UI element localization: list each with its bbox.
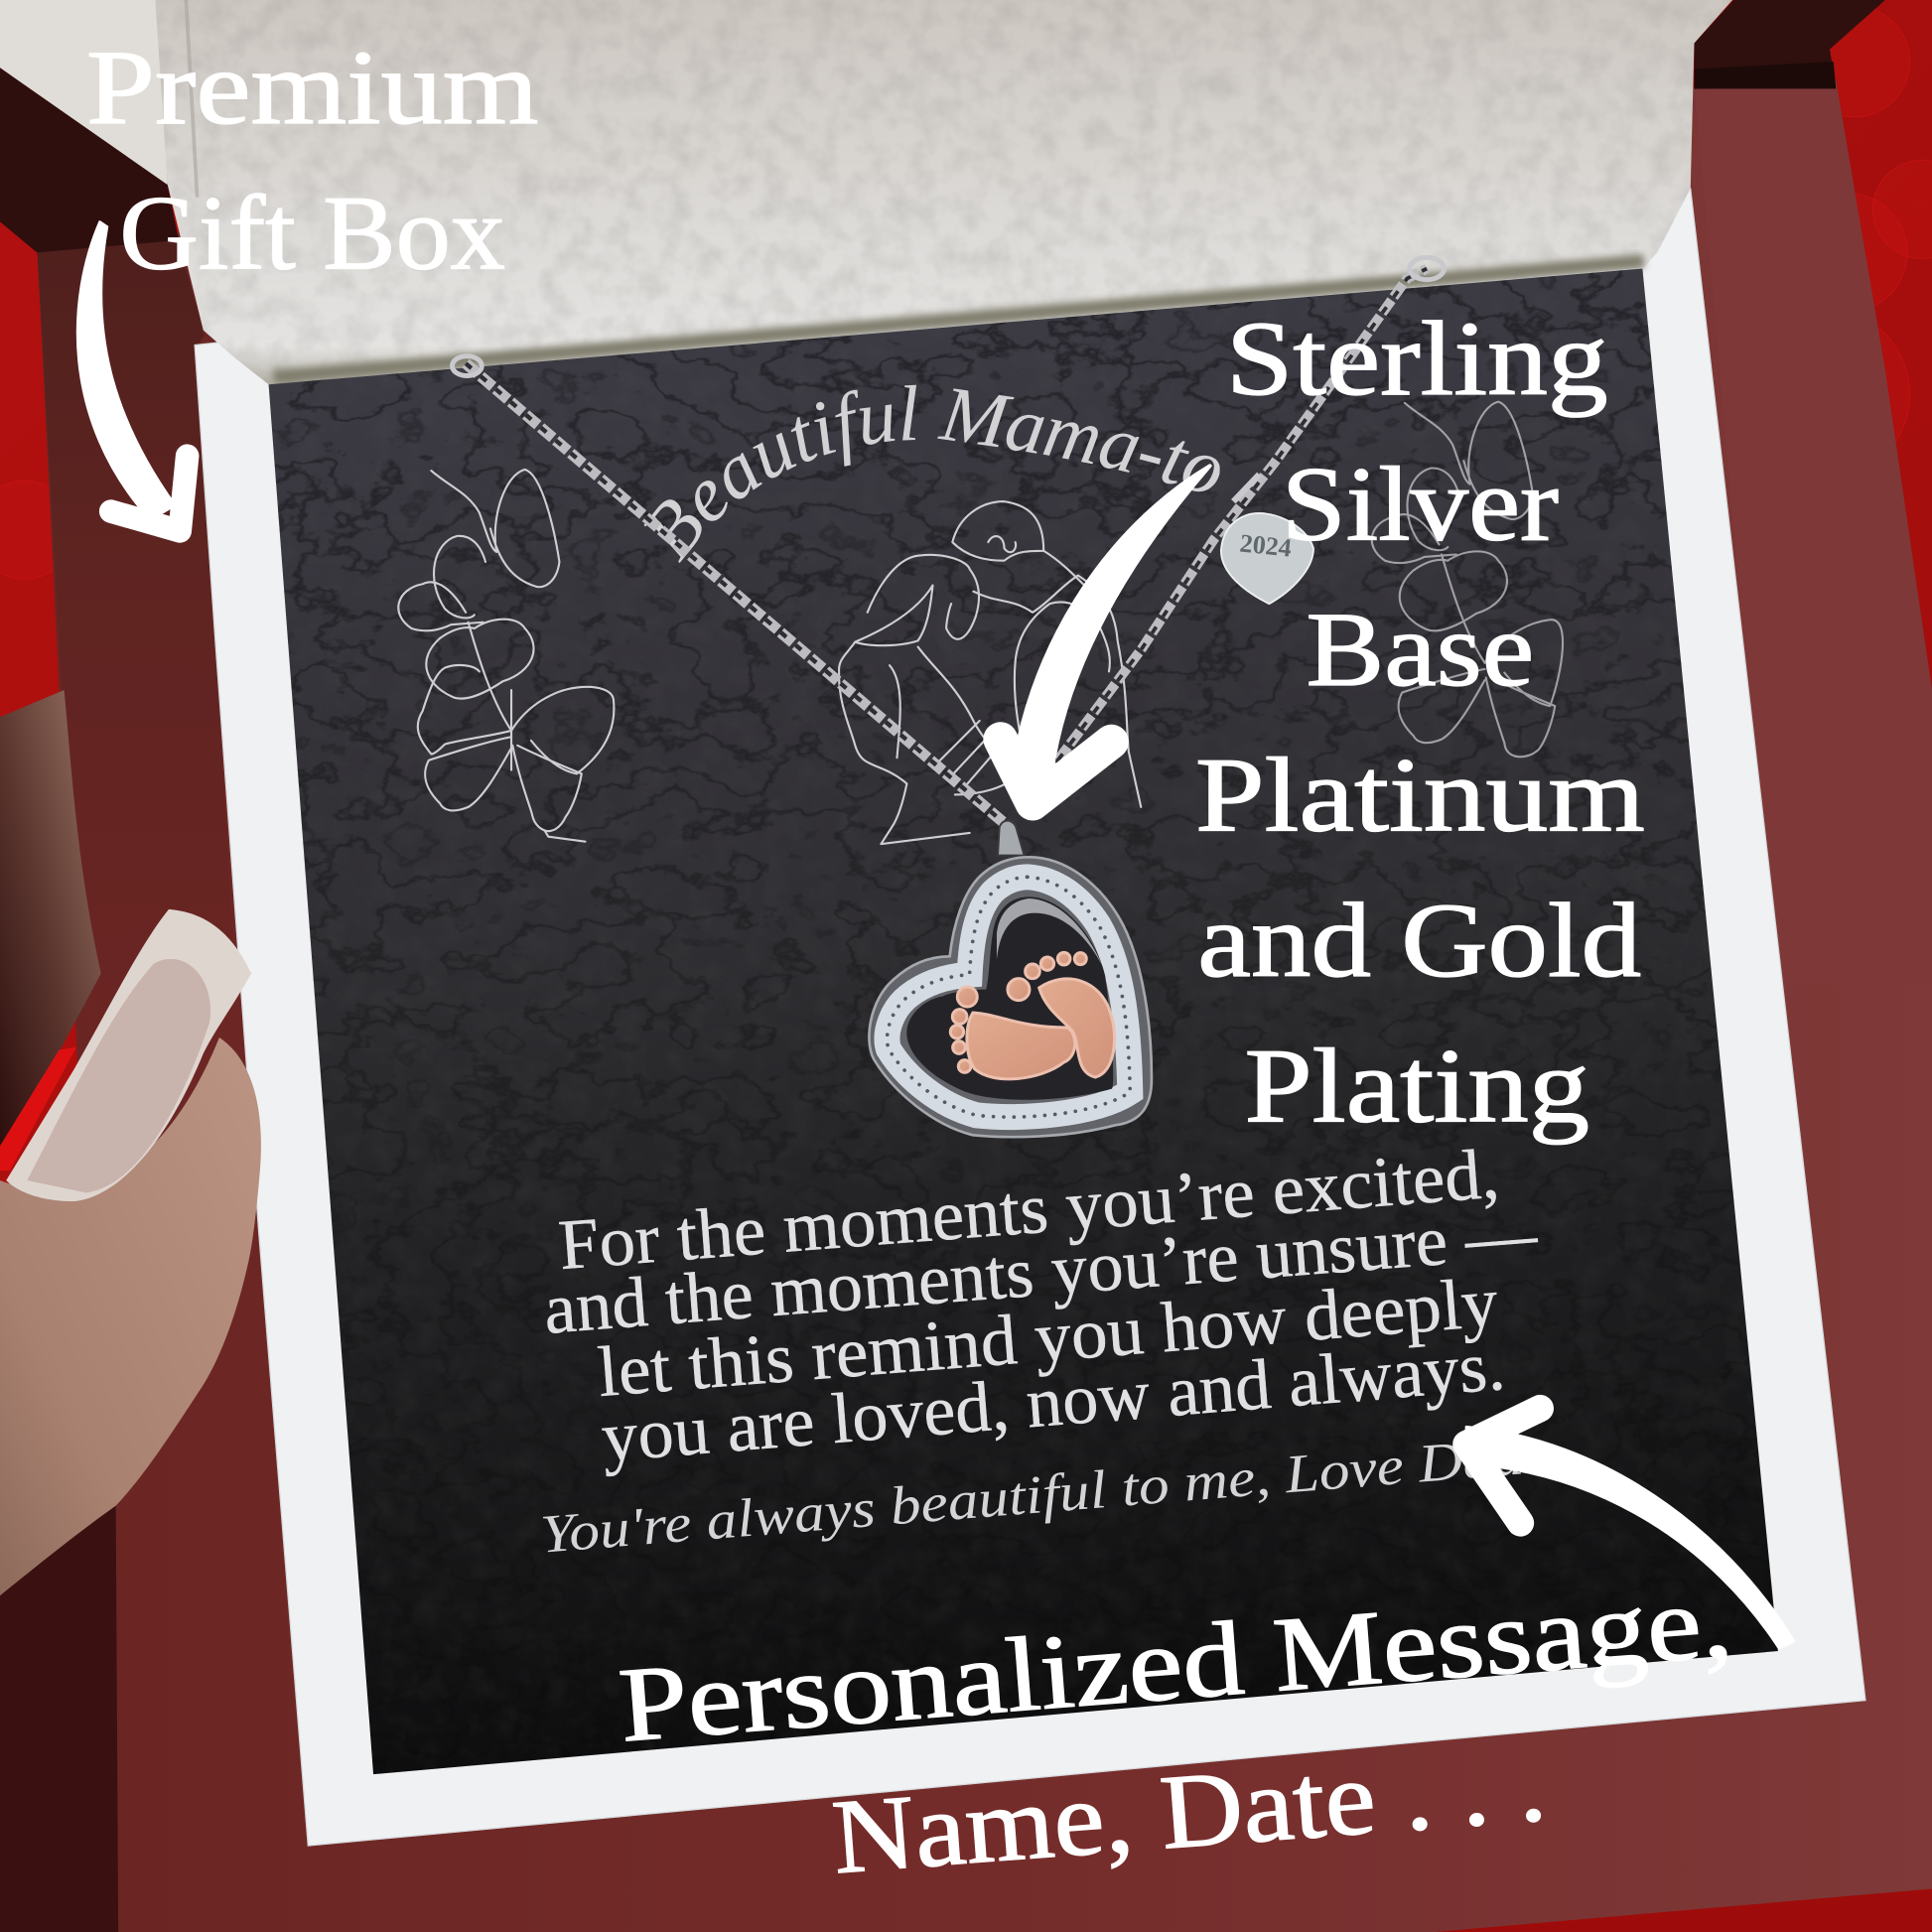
red sliver by the nail xyxy=(0,1047,76,1171)
white insert frame xyxy=(195,189,1865,1846)
small heart charm xyxy=(1221,475,1313,604)
heart frame xyxy=(869,857,1152,1137)
bokeh circles xyxy=(0,6,1932,579)
line art: family xyxy=(839,501,1141,844)
small heart charm: 2024 xyxy=(1238,528,1293,563)
label: materials: Plating xyxy=(1244,1028,1589,1145)
baby foot right xyxy=(1008,952,1115,1077)
sentiment text: and the moments you’re unsure — xyxy=(541,1193,1541,1349)
heart opening xyxy=(906,897,1113,1100)
red strip at the bottom xyxy=(1436,1889,1932,1932)
label: materials: and Gold xyxy=(1197,883,1641,1000)
hand: thumb xyxy=(0,1037,261,1595)
handwritten line: You're always beautiful to me, Love Dad xyxy=(538,1425,1526,1565)
label: materials: Base xyxy=(1307,592,1534,709)
arrow: message xyxy=(1466,1409,1794,1649)
label: materials: Silver xyxy=(1282,447,1559,564)
white lid wall left xyxy=(0,0,168,188)
hand: finger behind xyxy=(0,690,101,1149)
baby foot left xyxy=(950,987,1075,1079)
sentiment text: you are loved, now and always. xyxy=(599,1325,1508,1477)
label: materials: Sterling xyxy=(1226,301,1608,418)
script heading: Beautiful Mama-to-Be xyxy=(643,385,1220,564)
sentiment text: For the moments you’re excited, xyxy=(556,1134,1502,1285)
label: materials: Platinum xyxy=(1195,737,1645,854)
arrow: pendant xyxy=(1001,466,1210,803)
label: personalization: Personalized Message, xyxy=(616,1563,1735,1765)
pillow cushion xyxy=(148,0,1749,394)
label: premium gift box: Gift Box xyxy=(119,176,505,293)
label: materials xyxy=(1195,301,1645,1145)
sentiment text: let this remind you how deeply xyxy=(595,1262,1500,1412)
label: premium gift box: Premium xyxy=(86,30,538,147)
line art: butterflies left xyxy=(398,470,614,842)
thumb nail xyxy=(6,909,251,1201)
arrow: gift box xyxy=(77,221,188,531)
lid top right xyxy=(1694,0,1885,88)
line art: butterflies right xyxy=(1372,402,1563,757)
necklace chain left xyxy=(466,363,1004,823)
lid top left xyxy=(0,68,179,252)
pendant bail xyxy=(998,821,1025,856)
heart pendant xyxy=(869,821,1152,1137)
sentiment text xyxy=(541,1134,1541,1477)
crystal band xyxy=(888,877,1130,1117)
label: personalization xyxy=(616,1563,1735,1896)
label: personalization: Name, Date . . . xyxy=(828,1726,1550,1896)
label: premium gift box xyxy=(86,30,538,293)
metal rim xyxy=(997,898,1103,966)
necklace chain right xyxy=(452,257,1445,807)
message card xyxy=(259,259,1787,1787)
